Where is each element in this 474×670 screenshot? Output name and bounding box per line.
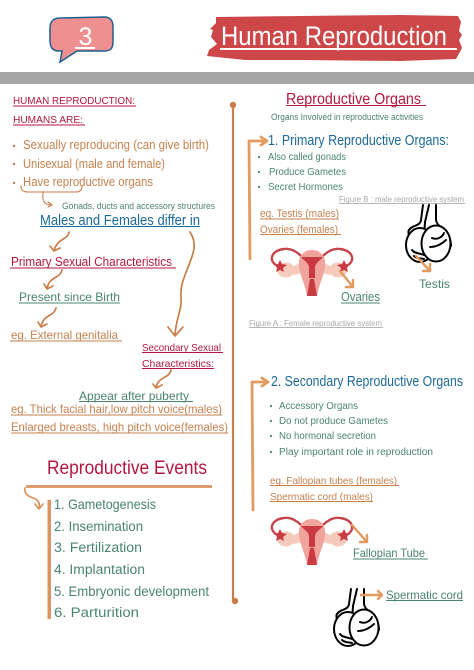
text: testis examples	[260, 208, 341, 236]
long arrow to secondary characteristics	[168, 232, 194, 336]
primary organs bullets	[258, 151, 346, 193]
arrow bracket to primary organs	[249, 137, 267, 259]
heading: humans are: HUMANS ARE:	[13, 114, 83, 126]
arrow to appear after puberty	[153, 370, 171, 388]
label: testis: Testis	[419, 277, 450, 291]
text: external genitalia: eg. External genitalia	[11, 328, 118, 342]
grey divider bar	[0, 72, 474, 84]
heading: human reproduction: HUMAN REPRODUCTION:	[13, 95, 135, 107]
primary organs bullets: Produce Gametes	[269, 166, 346, 178]
icon: spermatic cord	[334, 589, 379, 646]
heading: reproductive events: Reproductive Events	[47, 457, 207, 479]
primary organs bullets: Also called gonads	[268, 151, 346, 163]
icon: male reproductive system	[406, 205, 451, 262]
events list	[54, 496, 209, 620]
secondary organs bullets: Do not produce Gametes	[279, 416, 388, 427]
label: spermatic cord: Spermatic cord	[386, 588, 463, 602]
events list bar	[48, 500, 51, 619]
heading: secondary sexual characteristics	[142, 342, 223, 370]
text: secondary organ examples: Spermatic cord (males)	[270, 491, 373, 503]
subtitle: organs involved: Organs Involved in reproductive activities	[271, 112, 423, 123]
bullet list: human traits	[13, 138, 209, 189]
number badge speech bubble	[50, 17, 113, 62]
arrow to testis	[416, 256, 430, 271]
heading: secondary sexual characteristics: Characteristics:	[142, 358, 214, 370]
events list: 2. Insemination	[54, 518, 143, 534]
centre timeline line	[230, 102, 238, 604]
secondary organs bullets: No hormonal secretion	[279, 431, 376, 442]
secondary organs bullets: Accessory Organs	[279, 401, 358, 412]
icon: fallopian tube uterus	[272, 518, 352, 565]
secondary organs bullets: Play important role in reproduction	[279, 447, 433, 458]
arrow to spermatic cord	[361, 591, 382, 599]
bullet list: human traits: Have reproductive organs	[23, 175, 153, 189]
text: female characteristics: Enlarged breasts, high pitch voice(females)	[11, 420, 228, 434]
brace arrow to gonads note	[21, 186, 82, 207]
label: ovaries: Ovaries	[341, 290, 380, 304]
rule and arrow into events list	[25, 486, 212, 509]
caption: figure A: Figure A : Female reproductive system	[249, 319, 382, 328]
events list: 4. Implantation	[54, 562, 145, 577]
events list: 6. Parturition	[54, 605, 139, 620]
arrow bracket to secondary organs	[252, 378, 268, 510]
caption: figure B: Figure B : male reproductive system	[339, 195, 464, 204]
arrow to fallopian tube	[352, 525, 367, 542]
bullet list: human traits: Sexually reproducing (can give birth)	[23, 138, 209, 152]
arrow to external genitalia	[38, 308, 56, 327]
number badge speech bubble: 3	[79, 23, 92, 51]
events list: 5. Embryonic development	[54, 583, 209, 599]
label: fallopian tube: Fallopian Tube	[353, 546, 425, 560]
heading: reproductive organs: Reproductive Organs	[286, 91, 421, 108]
text: appear after puberty: Appear after puberty	[79, 389, 189, 403]
text: present since birth: Present since Birth	[19, 290, 120, 304]
title banner: Human Reproduction	[221, 21, 447, 51]
arrow to primary characteristics	[50, 232, 69, 251]
events list: 1. Gametogenesis	[54, 496, 156, 512]
text: testis examples: Ovaries (females)	[260, 224, 338, 236]
title banner	[207, 15, 462, 61]
heading: secondary sexual characteristics: Secondary Sexual	[142, 342, 221, 354]
heading: primary sexual characteristics: Primary Sexual Characteristics	[11, 255, 172, 269]
secondary organs bullets	[270, 401, 433, 458]
arrow to ovaries	[340, 271, 353, 287]
icon: female reproductive system	[272, 249, 352, 296]
arrow to present since birth	[44, 270, 62, 289]
note: gonads, ducts: Gonads, ducts and accessory structures	[62, 201, 216, 211]
text: secondary organ examples: eg. Fallopian tubes (females)	[270, 475, 397, 487]
text: secondary organ examples	[270, 475, 399, 503]
heading: males and females differ: Males and Females differ in	[40, 212, 200, 229]
bullet list: human traits: Unisexual (male and female)	[23, 157, 165, 171]
text: testis examples: eg. Testis (males)	[260, 208, 339, 220]
text: male characteristics: eg. Thick facial hair,low pitch voice(males)	[11, 402, 222, 416]
events list: 3. Fertilization	[54, 540, 142, 555]
primary organs bullets: Secret Hormones	[268, 181, 343, 193]
